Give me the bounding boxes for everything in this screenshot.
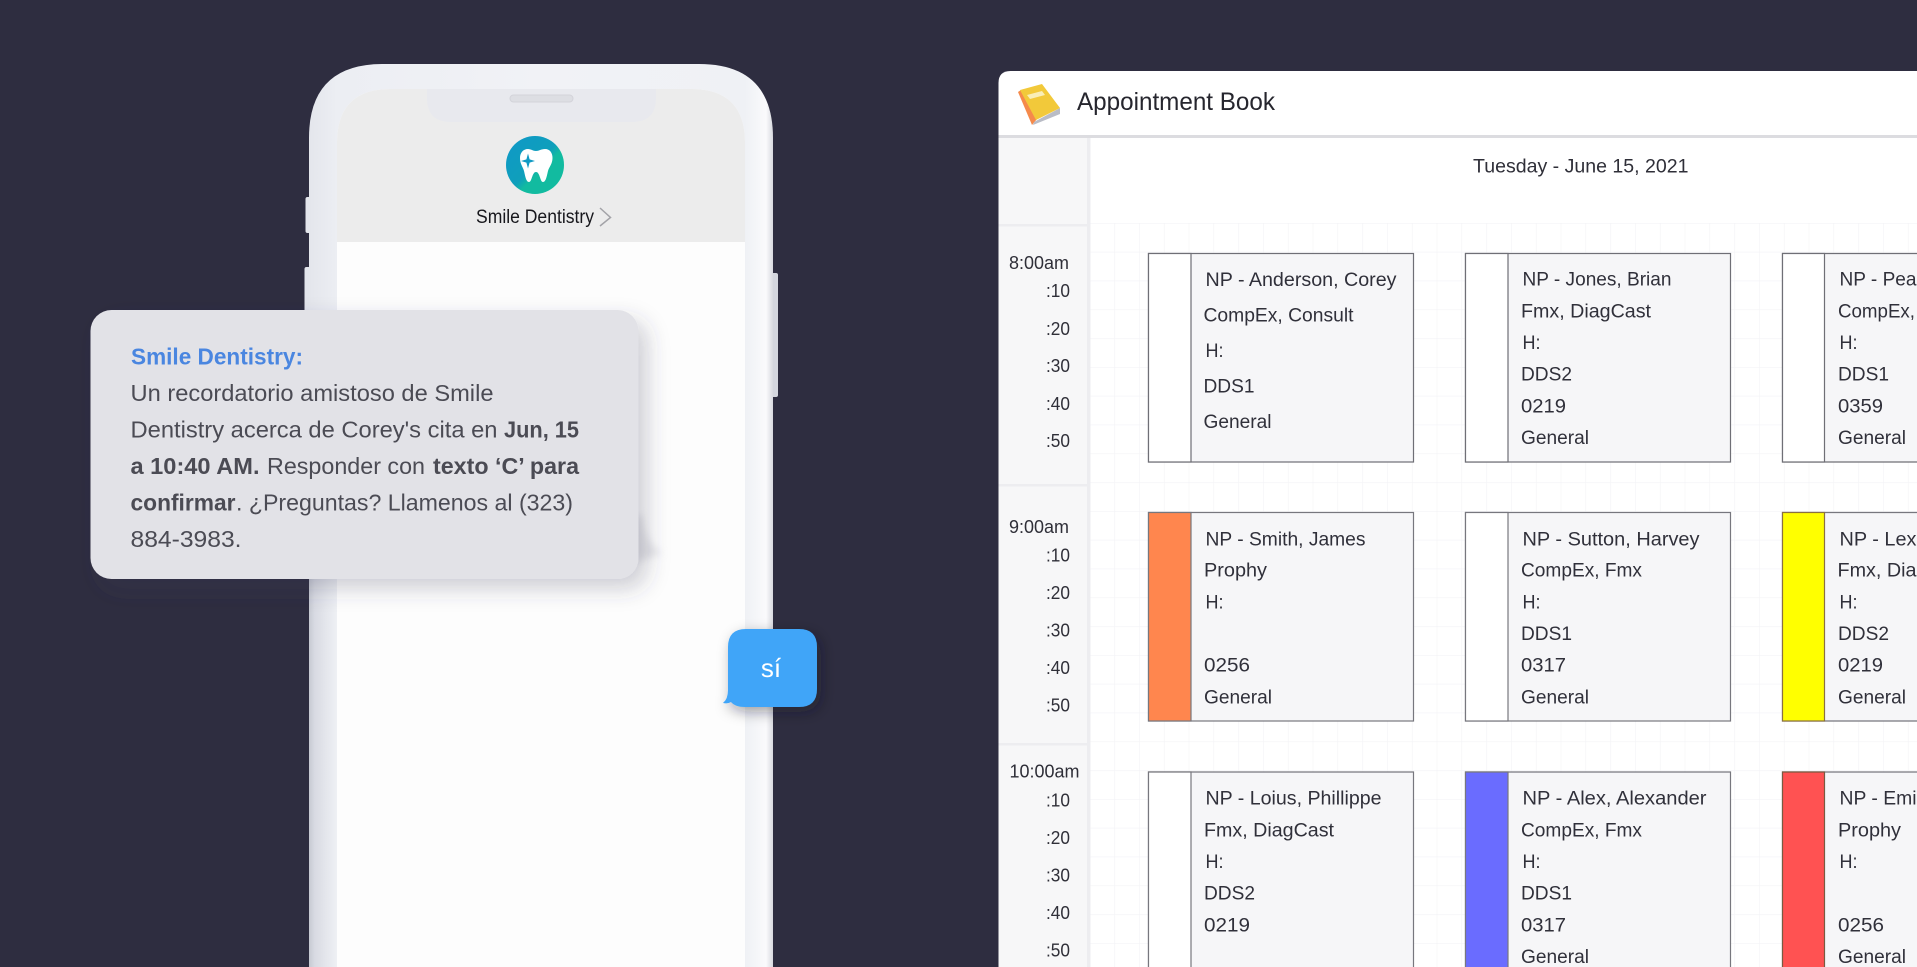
time labels: :50 [1046, 431, 1070, 451]
appointment card: Pea: H: [1840, 333, 1858, 354]
time column [998, 137, 1090, 967]
phone side buttons [304, 197, 778, 397]
time labels: :40 [1046, 658, 1070, 678]
appointment card: Alex: DDS1 [1521, 884, 1572, 905]
appointment card: Jones: 0219 [1521, 396, 1566, 417]
time labels: :20 [1046, 319, 1070, 339]
contact name: Smile Dentistry [476, 207, 594, 228]
appointment card: Sutton: NP - Sutton, Harvey [1522, 529, 1700, 550]
appointment card: Loius: DDS2 [1204, 884, 1255, 905]
panel background [998, 71, 1917, 967]
appointment card: Emi [1782, 772, 1917, 967]
appointment card: Sutton: DDS1 [1521, 624, 1572, 645]
appointment card: Jones: H: [1522, 333, 1540, 354]
appointment card: Sutton: H: [1522, 592, 1540, 613]
appointment card: Anderson [1148, 254, 1414, 462]
message text [130, 380, 580, 552]
time labels: :50 [1046, 940, 1070, 960]
appointment card: Lex: 0219 [1838, 656, 1883, 677]
appointment card: Loius [1148, 772, 1414, 967]
appointment card: Anderson: DDS1 [1204, 376, 1254, 398]
date heading: Tuesday - June 15, 2021 [1473, 156, 1688, 178]
appointment card: Alex: 0317 [1521, 915, 1566, 936]
message text: Jun, 15 [504, 416, 579, 442]
appointment card: Lex [1782, 512, 1917, 721]
panel: appointment book [998, 71, 1917, 967]
header title: Appointment Book [1077, 88, 1275, 116]
time labels: 9:00am [1009, 517, 1069, 537]
time labels: :20 [1046, 583, 1070, 603]
appointment card: Alex: NP - Alex, Alexander [1522, 789, 1707, 810]
time labels: :50 [1046, 696, 1070, 716]
time labels: :10 [1046, 790, 1070, 810]
appointment card: Anderson: General [1204, 412, 1272, 433]
appointment card: Sutton: CompEx, Fmx [1521, 561, 1642, 582]
time labels: :20 [1046, 828, 1070, 848]
incoming message bubble [90, 310, 662, 579]
appointment card: Alex: H: [1522, 852, 1540, 873]
phone body [309, 64, 773, 967]
appointment card: Loius: NP - Loius, Phillippe [1206, 789, 1382, 810]
appointment card: Alex: CompEx, Fmx [1521, 820, 1642, 841]
panel header [998, 84, 1917, 138]
appointment card: Smith: H: [1206, 592, 1224, 613]
time labels: :30 [1046, 356, 1070, 376]
message text: 884-3983. [130, 526, 242, 552]
sender name: Smile Dentistry: [131, 344, 303, 370]
appointment card: Jones: DDS2 [1521, 365, 1572, 386]
appointment card: Smith: General [1204, 687, 1272, 708]
icon: smile dentistry tooth logo [506, 136, 564, 194]
message text: texto ‘C’ para [433, 453, 580, 479]
appointment card: Alex [1466, 772, 1730, 967]
appointment card: Lex: H: [1840, 592, 1858, 613]
appointment card: Sutton: General [1521, 687, 1589, 708]
message text: confirmar [130, 490, 236, 516]
phone mockup [304, 64, 778, 967]
appointment card: Jones [1466, 254, 1730, 462]
appointment card: Jones: Fmx, DiagCast [1521, 301, 1652, 322]
appointment card: Pea: CompEx, [1838, 301, 1915, 322]
appointment card: Emi: 0256 [1838, 915, 1884, 936]
time labels: :30 [1046, 866, 1070, 886]
bubble body [90, 310, 638, 579]
appointment card: Emi: NP - Emi [1840, 789, 1916, 810]
appointment card: Pea: DDS1 [1838, 365, 1889, 386]
appointment card: Emi: Prophy [1838, 820, 1902, 841]
appointment card: Smith [1148, 512, 1414, 721]
appointment card: Anderson: H: [1206, 341, 1224, 362]
phone notch [427, 89, 656, 122]
phone left edge shading [309, 310, 337, 967]
appointment card: Lex: Fmx, Dia [1838, 561, 1917, 582]
appointment card: Jones: NP - Jones, Brian [1522, 270, 1672, 290]
time labels: :40 [1046, 394, 1070, 414]
schedule grid [1090, 223, 1917, 967]
appointment card: Lex: NP - Lex [1840, 529, 1917, 550]
reply bubble: sí [761, 653, 782, 683]
appointment card: Pea: 0359 [1838, 396, 1883, 417]
time labels: :10 [1046, 546, 1070, 566]
appointment card: Pea: General [1838, 428, 1906, 449]
appointment card: Loius: Fmx, DiagCast [1204, 820, 1335, 841]
bubble tail [625, 515, 662, 566]
time labels: :30 [1046, 620, 1070, 640]
message text: Un recordatorio amistoso de Smile [130, 380, 493, 406]
appointment card: Smith: 0256 [1204, 656, 1250, 677]
message text: . ¿Preguntas? Llamenos al (323) [236, 490, 573, 516]
icon: book [1018, 84, 1060, 125]
phone screen [337, 89, 745, 967]
message text: a 10:40 AM. [130, 453, 260, 479]
message text: Responder con [267, 453, 425, 479]
appointment card: Smith: NP - Smith, James [1206, 529, 1366, 550]
appointment card: Pea: NP - Pea [1840, 270, 1917, 290]
appointment card: Pea [1782, 254, 1917, 462]
time labels: :40 [1046, 903, 1070, 923]
appointment card: Loius: H: [1206, 852, 1224, 873]
time labels: 8:00am [1009, 253, 1069, 273]
appointment card: Lex: DDS2 [1838, 624, 1889, 645]
reply bubble [723, 629, 817, 707]
message text: Dentistry acerca de Corey's cita en [130, 416, 498, 442]
appointment card: Lex: General [1838, 687, 1906, 708]
appointment card: Emi: H: [1840, 852, 1858, 873]
appointment card: Loius: 0219 [1204, 915, 1250, 936]
appointment card: Jones: General [1521, 428, 1589, 449]
appointment card: Smith: Prophy [1204, 561, 1268, 582]
time labels: :10 [1046, 281, 1070, 301]
appointment card: Sutton: 0317 [1521, 656, 1566, 677]
appointment card: Sutton [1466, 512, 1730, 721]
time labels [1009, 253, 1080, 960]
appointment card: Anderson: NP - Anderson, Corey [1206, 270, 1397, 291]
time labels: 10:00am [1010, 762, 1080, 782]
appointment card: Anderson: CompEx, Consult [1204, 306, 1354, 326]
